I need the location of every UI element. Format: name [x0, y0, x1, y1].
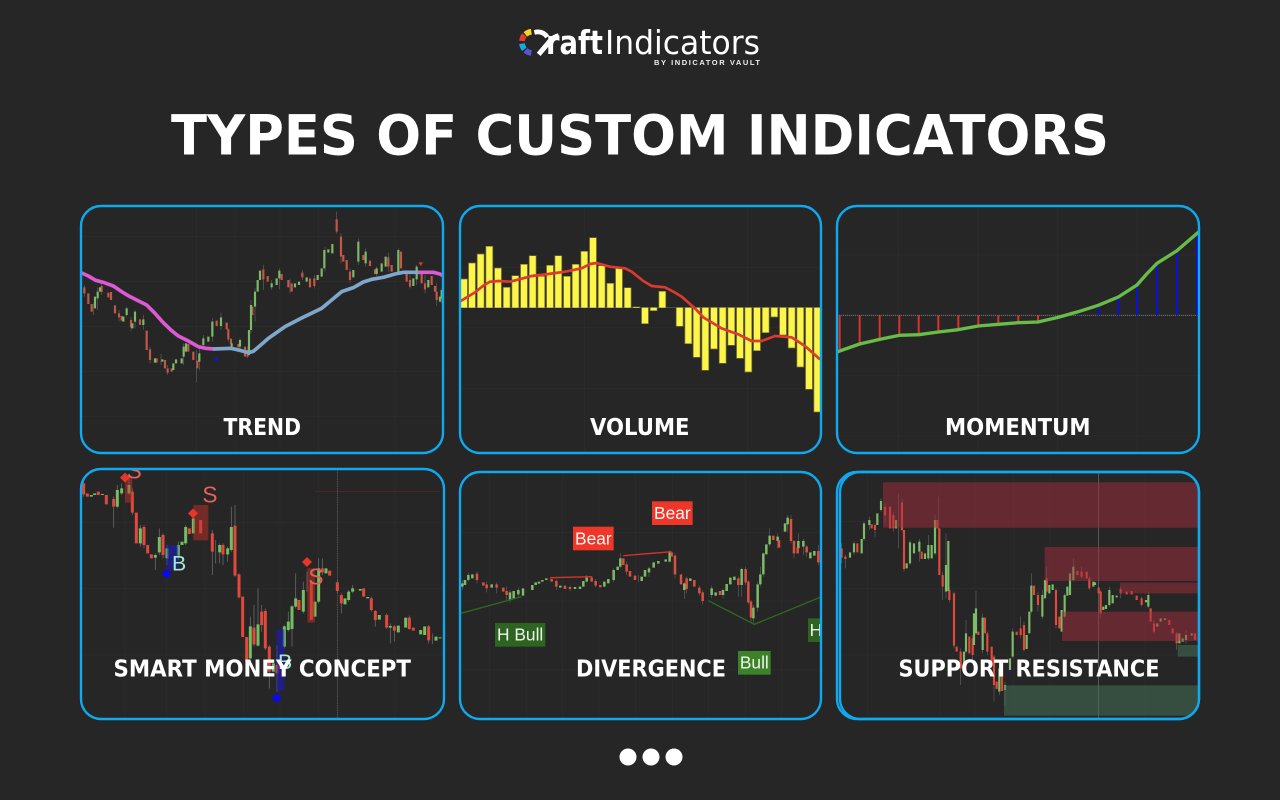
blue momentum bars — [1078, 236, 1197, 315]
panel border — [81, 206, 443, 453]
logo wordmark: raft — [546, 23, 603, 62]
red candles — [84, 219, 437, 373]
resistance zones — [883, 482, 1200, 641]
panel: volume — [460, 206, 822, 453]
label: smart money concept: SMART MONEY CONCEPT — [114, 654, 411, 682]
label: momentum: MOMENTUM — [945, 413, 1090, 441]
green candles — [850, 501, 1192, 692]
green candles — [91, 485, 440, 672]
sell diamonds — [120, 473, 312, 567]
label: bull: Bull — [740, 653, 769, 673]
sell labels: S — [202, 482, 217, 508]
label: trend: TREND — [224, 413, 301, 441]
buy labels: B — [278, 650, 292, 674]
label: volume: VOLUME — [590, 413, 690, 441]
red candles — [84, 483, 429, 673]
sell labels — [128, 470, 322, 584]
bearish divergence lines — [550, 552, 672, 578]
icon: signal dot — [1009, 671, 1011, 673]
sell labels: S — [308, 563, 323, 589]
red momentum bars — [840, 315, 1038, 349]
icon: logo colour ring — [522, 32, 559, 54]
bullish divergence lines — [460, 597, 822, 624]
green candles — [462, 518, 814, 618]
label: divergence: DIVERGENCE — [576, 654, 726, 682]
panel border — [81, 469, 444, 719]
logo — [522, 23, 760, 67]
moving average bearish end — [418, 272, 444, 277]
red candles — [842, 502, 1195, 691]
green candles — [95, 242, 442, 370]
buy zones — [167, 545, 284, 691]
icon: sell arrow — [419, 262, 423, 266]
buy diamonds — [162, 569, 282, 703]
icon: buy arrow — [214, 356, 219, 361]
buy labels: B — [172, 551, 186, 575]
logo wordmark light: Indicators — [605, 23, 760, 62]
panel: support resistance — [837, 472, 1200, 719]
panel: smart money concept — [81, 457, 444, 719]
panel border — [837, 206, 1199, 453]
title: TYPES OF CUSTOM INDICATORS — [171, 104, 1109, 168]
panel: divergence — [460, 472, 825, 719]
red candles — [477, 519, 818, 618]
sell labels: S — [127, 457, 142, 483]
label: support resistance: SUPPORT RESISTANCE — [898, 654, 1160, 682]
moving average bullish — [213, 272, 420, 353]
histogram bar outlines — [464, 237, 817, 412]
sell zones — [125, 478, 315, 623]
histogram bars — [464, 238, 817, 412]
panel: momentum — [837, 206, 1199, 453]
signal line — [460, 263, 820, 359]
label: hidden bull 2: H — [810, 620, 822, 640]
label: hidden bull 2 — [808, 618, 820, 642]
panel border — [460, 206, 821, 453]
label: bear 2: Bear — [654, 503, 691, 523]
buy labels — [172, 551, 292, 674]
momentum line — [837, 231, 1199, 352]
support zones — [1004, 645, 1200, 716]
label: hidden bull 1: H Bull — [497, 625, 543, 645]
panel: trend — [81, 206, 444, 453]
moving average bearish — [81, 273, 214, 349]
pagination dots — [620, 748, 682, 766]
logo tagline: BY INDICATOR VAULT — [654, 58, 760, 67]
panel border — [460, 472, 821, 719]
panel border — [837, 472, 1199, 719]
label: bear 1: Bear — [575, 528, 612, 548]
